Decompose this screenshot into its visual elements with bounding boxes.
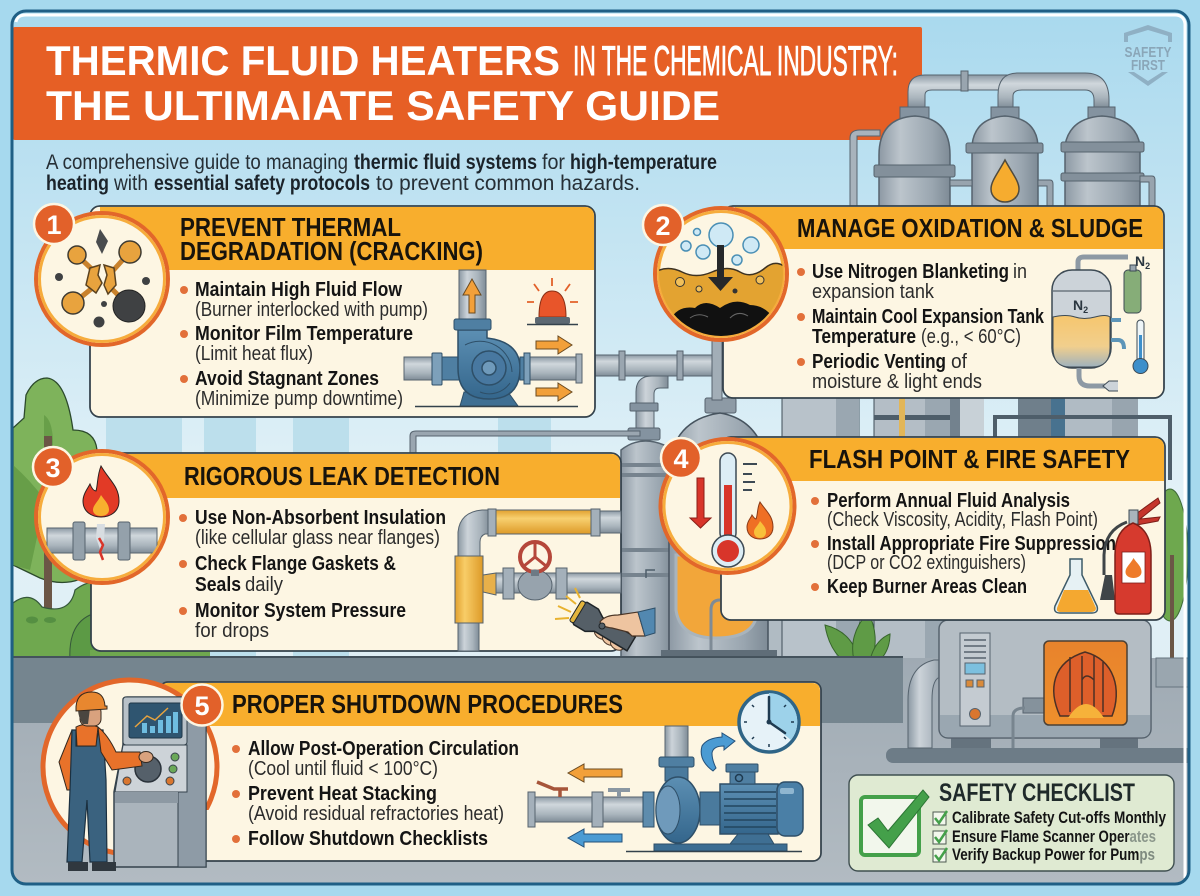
title banner: IN THE CHEMICAL INDUSTRY: [573, 37, 898, 84]
bullet list: Maintain Cool Expansion Tank [812, 306, 1045, 328]
central vessel [661, 340, 777, 660]
heading: FLASH POINT & FIRE SAFETY [809, 446, 1130, 474]
icon: hand with flashlight [555, 588, 655, 655]
badge 1: 1 [46, 210, 62, 240]
heading: MANAGE OXIDATION & SLUDGE [797, 215, 1143, 243]
icon: expansion tank with nitrogen: N [1135, 253, 1145, 269]
icon: expansion tank with nitrogen: 2 [1145, 261, 1150, 271]
heater unit [908, 620, 1151, 748]
bullet list: Use Nitrogen Blanketing [812, 261, 1009, 283]
bullet list [180, 279, 428, 410]
title banner: THE ULTIMAIATE SAFETY GUIDE [46, 82, 720, 129]
bullet list: Use Non-Absorbent Insulation [195, 507, 446, 529]
safety first stamp [1124, 25, 1172, 86]
icon circle 4: thermometer and flame [660, 439, 794, 573]
icon: pipework with valve [455, 509, 621, 651]
background: skyline and plant [13, 340, 1196, 883]
icon: pump with flow arrows [404, 270, 582, 406]
title banner [13, 27, 922, 140]
badge 3: 3 [45, 453, 61, 483]
bullet list: (Limit heat flux) [195, 343, 313, 365]
bullet list: (DCP or CO2 extinguishers) [827, 552, 1026, 574]
badge 5 [182, 684, 222, 726]
bullet list: Temperature [812, 326, 916, 348]
bullet list: Avoid Stagnant Zones [195, 368, 379, 390]
arrow: restart curve [701, 733, 735, 771]
subtitle: with [113, 172, 148, 195]
heater fire window [1044, 641, 1127, 725]
panel 5: proper shutdown procedures [160, 682, 821, 861]
icon circle 1: cracking molecule [36, 213, 168, 345]
bullet list: in [1013, 261, 1027, 283]
bullet list: Follow Shutdown Checklists [248, 828, 488, 850]
bullet list: Keep Burner Areas Clean [827, 576, 1027, 598]
badge 4 [661, 438, 701, 478]
badge 4: 4 [673, 444, 689, 474]
skyline [106, 418, 551, 660]
bullet list [232, 738, 519, 850]
badge 5: 5 [194, 691, 210, 721]
subtitle: A comprehensive guide to managing [46, 151, 348, 174]
safety first stamp: SAFETY [1124, 44, 1172, 61]
subtitle: high-temperature [570, 151, 717, 174]
storage tanks [850, 71, 1155, 210]
bullet list [179, 507, 446, 642]
bullet list: (Check Viscosity, Acidity, Flash Point) [827, 509, 1098, 531]
icon: expansion tank with nitrogen: 2 [1083, 305, 1088, 315]
back columns [765, 398, 1170, 660]
bullet list: moisture & light ends [812, 371, 982, 393]
icon circle 5: operator at control panel [43, 680, 224, 871]
heading [180, 214, 483, 266]
bullet list: Prevent Heat Stacking [248, 783, 437, 805]
panel 4: flash point and fire safety [721, 437, 1165, 620]
icon: expansion tank with nitrogen: N [1073, 297, 1083, 313]
tree: left [13, 378, 210, 660]
subtitle: heating [46, 172, 109, 195]
icon: motor pump with valve [528, 726, 803, 852]
bullet list: for drops [195, 620, 269, 642]
heading: SAFETY CHECKLIST [939, 779, 1135, 807]
connecting pipes [410, 351, 712, 453]
bullet list: Monitor Film Temperature [195, 323, 413, 345]
panel 2: manage oxidation and sludge [723, 206, 1164, 398]
check items [933, 808, 1166, 864]
bullet list: Seals [195, 574, 241, 596]
bullet list: (Avoid residual refractories heat) [248, 803, 504, 825]
ground [13, 656, 1196, 883]
bullet list: (Burner interlocked with pump) [195, 299, 428, 321]
icon: oil drop on tank [991, 160, 1019, 202]
safety first stamp: FIRST [1131, 57, 1165, 74]
subtitle: thermic fluid systems [354, 151, 537, 174]
bullet list: Install Appropriate Fire Suppression [827, 533, 1116, 555]
subtitle: for [542, 151, 565, 174]
plant leaves [824, 620, 890, 656]
arrows: flow directions [568, 764, 622, 847]
bullet list: expansion tank [812, 281, 935, 303]
heading: DEGRADATION (CRACKING) [180, 238, 483, 266]
badge 2: 2 [655, 211, 671, 241]
title banner: THERMIC FLUID HEATERS [46, 37, 560, 84]
badge 1 [34, 204, 74, 244]
icon: clock [739, 692, 799, 752]
bullet list: Periodic Venting [812, 351, 946, 373]
tree: right [1163, 488, 1188, 658]
subtitle: to prevent common hazards. [376, 172, 640, 195]
icon circle 2: bubbles and sludge [655, 208, 790, 345]
check items: Ensure Flame Scanner Operates [952, 827, 1156, 846]
icon: fire extinguisher [1100, 498, 1160, 614]
heading: RIGOROUS LEAK DETECTION [184, 463, 500, 491]
heading: PREVENT THERMAL [180, 214, 401, 242]
badge 2 [643, 205, 683, 245]
subtitle [46, 151, 717, 195]
bullet list [797, 261, 1045, 393]
badge 3 [33, 447, 73, 487]
icon: lab flask [1055, 559, 1097, 613]
bullet list: of [951, 351, 967, 373]
bullet list: (Minimize pump downtime) [195, 388, 403, 410]
control console [114, 697, 206, 867]
operator [59, 692, 153, 871]
panel 3: rigorous leak detection [91, 453, 621, 651]
icon: large check [861, 790, 929, 855]
bullet list [811, 490, 1116, 598]
icon circle 3: leaking flange [36, 451, 168, 583]
panel: safety checklist [849, 775, 1174, 871]
icon: expansion tank with nitrogen [1052, 253, 1150, 391]
second vessel [621, 428, 672, 660]
bullet list: Check Flange Gaskets & [195, 553, 396, 575]
bullet list: Allow Post-Operation Circulation [248, 738, 519, 760]
heading: PROPER SHUTDOWN PROCEDURES [232, 691, 623, 719]
panel 1: prevent thermal degradation [90, 206, 595, 417]
bullet list: Maintain High Fluid Flow [195, 279, 402, 301]
icon: alarm beacon [527, 278, 578, 324]
bullet list: daily [245, 574, 283, 596]
bullet list: Perform Annual Fluid Analysis [827, 490, 1070, 512]
bullet list: (like cellular glass near flanges) [195, 527, 440, 549]
check items: Verify Backup Power for Pumps [952, 845, 1155, 864]
bullet list: (e.g., < 60°C) [921, 326, 1021, 348]
bullet list: Monitor System Pressure [195, 600, 406, 622]
bullet list: (Cool until fluid < 100°C) [248, 758, 438, 780]
subtitle: essential safety protocols [154, 172, 370, 195]
